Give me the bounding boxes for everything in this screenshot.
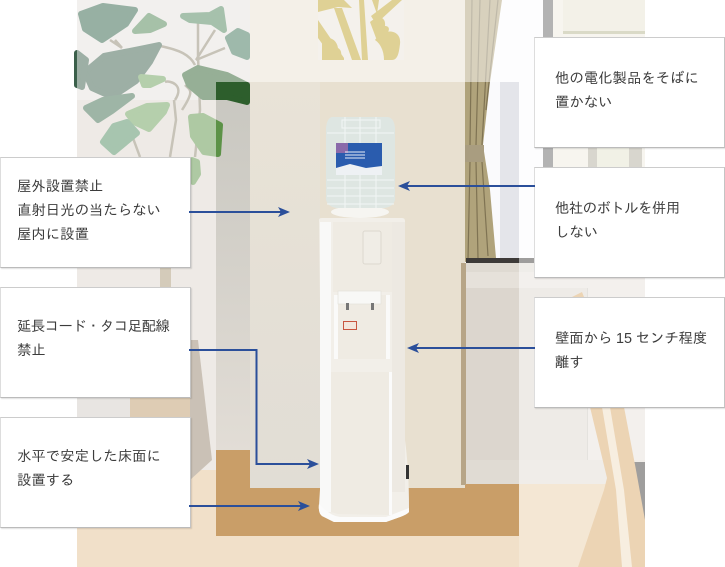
water recess [334,295,388,359]
warning sticker [344,322,356,330]
plant [77,6,247,182]
wall art [318,0,404,60]
callout: outdoor installation prohibited: 直射日光の当たらない [17,203,161,219]
arrow: to floor [189,501,310,511]
curtain and window [465,0,645,265]
water bottle [326,117,395,208]
water dispenser [319,117,409,522]
callout: 15 cm from wall [534,297,725,408]
callout: no other brand bottles [534,167,725,278]
faucets [338,291,381,310]
callout: 15 cm from wall: 離す [555,355,584,371]
dispenser body [319,218,409,522]
callout: extension cords prohibited [0,287,191,398]
callout: no other brand bottles: 他社のボトルを併用 [555,201,680,217]
callout: outdoor installation prohibited: 屋外設置禁止 [17,179,103,195]
bottle label [336,143,382,175]
callout: level stable floor: 設置する [17,473,75,489]
callout: level stable floor [0,417,191,528]
callout: outdoor installation prohibited: 屋内に設置 [17,227,89,243]
lower door [331,361,390,515]
counter and cabinet [461,263,645,522]
table leg [572,292,645,567]
callout: extension cords prohibited: 禁止 [17,343,46,359]
callout: 15 cm from wall: 壁面から 15 センチ程度 [555,331,707,347]
arrow: to bottle [398,181,535,191]
bottle neck [331,206,389,218]
callout: outdoor installation prohibited [0,157,191,268]
room walls and floor [77,0,645,567]
white veil outside focus area [77,0,645,567]
callout: keep other appliances away: 置かない [555,95,613,111]
easel and fabric [77,267,212,480]
callout: no other brand bottles: しない [555,225,598,241]
callout: keep other appliances away [534,37,725,148]
arrow: cord route to dispenser [189,349,319,469]
callout: level stable floor: 水平で安定した床面に [17,449,161,465]
arrow: to room wall [189,207,290,217]
arrow: to wall gap [407,343,535,353]
callout: extension cords prohibited: 延長コード・タコ足配線 [17,319,169,335]
dispenser panel [333,222,392,292]
callout: keep other appliances away: 他の電化製品をそばに [555,71,699,87]
power cord [406,465,409,479]
